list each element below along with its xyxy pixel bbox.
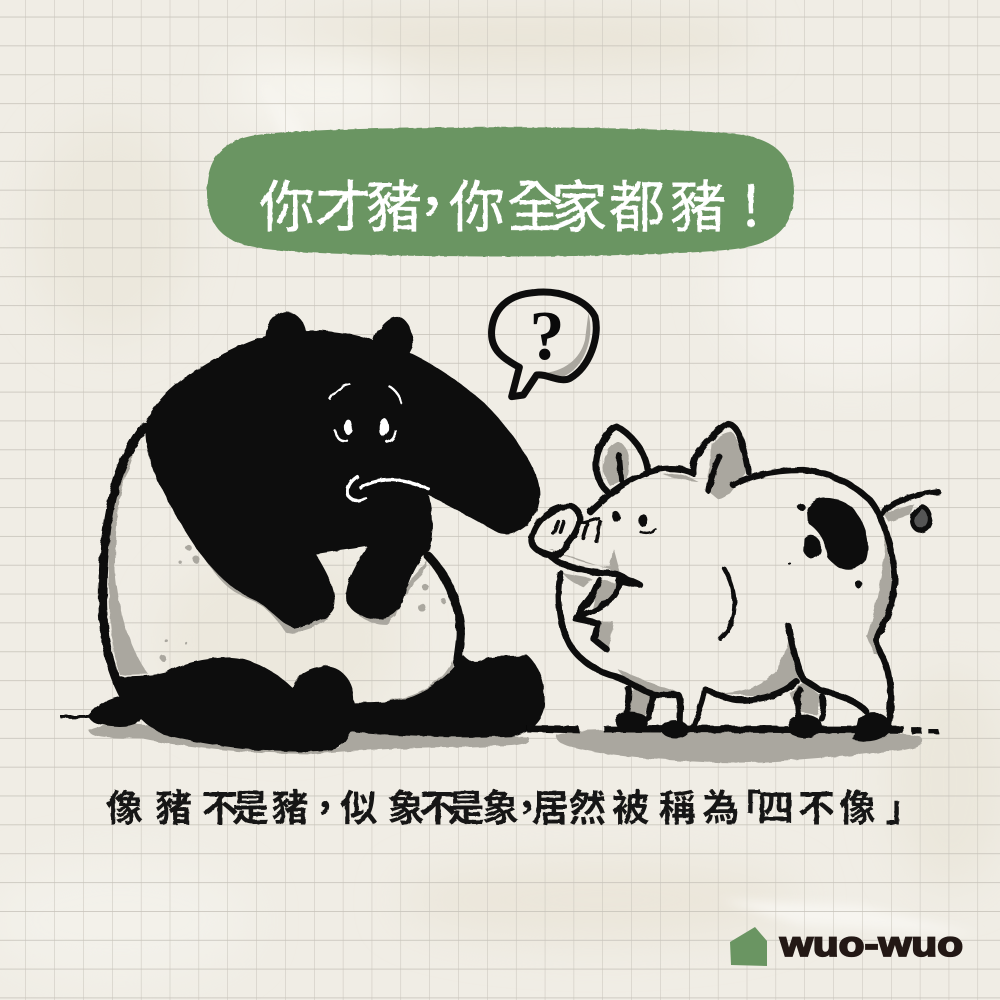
green pill (207, 127, 794, 256)
tapir ground shadow (88, 724, 529, 754)
logo (730, 925, 963, 966)
pig ground shadow (556, 730, 923, 763)
caption: 像豬不是豬，似象不是象，居然被稱為「四不像」 (106, 788, 922, 829)
ground line left and right (60, 717, 560, 729)
pig body outline (532, 424, 938, 727)
logo wordmark: wuo-wuo (779, 925, 963, 964)
tapir face (330, 384, 428, 501)
title text: 你才豬，你全家都豬！ (259, 176, 779, 239)
tapir body shadows (108, 447, 457, 701)
tapir lower legs and tail (90, 656, 544, 750)
tapir back, legs and ear silhouette (146, 312, 539, 627)
speech bubble with question mark (492, 292, 596, 397)
tapir (60, 312, 560, 754)
pig grey shading (550, 432, 913, 715)
pig (527, 424, 938, 763)
logo house icon (730, 927, 767, 966)
tapir speckles (160, 545, 446, 661)
tapir body outline (103, 427, 461, 698)
title banner (207, 127, 794, 256)
bubble shape (492, 292, 596, 397)
question mark: ? (530, 298, 564, 375)
pig feet and ground line (527, 712, 938, 742)
pig eyes (612, 511, 648, 527)
pig spots and dots (788, 498, 868, 589)
